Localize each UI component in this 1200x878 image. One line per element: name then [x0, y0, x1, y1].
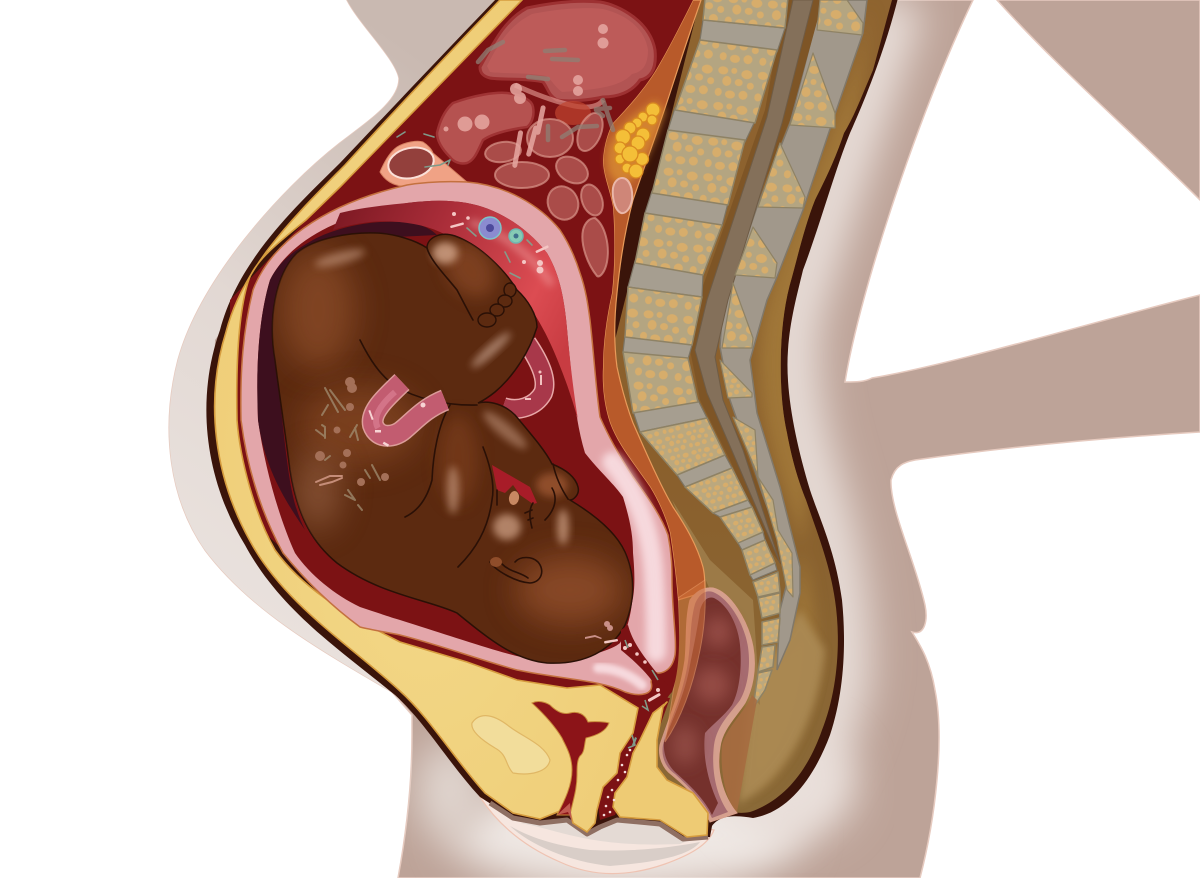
dark amniotic shadow	[257, 222, 437, 530]
abdominal organs	[380, 1, 665, 276]
placental highlight	[470, 222, 552, 285]
pelvic channel	[596, 695, 670, 820]
urethra gap	[557, 803, 572, 822]
rectum	[660, 588, 754, 822]
fetal flora	[315, 370, 613, 639]
nose	[508, 490, 520, 506]
spinous processes	[720, 0, 863, 597]
body outline	[206, 0, 898, 839]
ear lobe	[490, 557, 502, 567]
intervertebral discs	[623, 20, 785, 580]
orange membrane overlay	[665, 580, 705, 742]
red gap between hand and face	[492, 465, 537, 504]
spine	[623, 0, 867, 708]
colon	[437, 93, 533, 163]
back tissue	[600, 0, 892, 825]
stomach bulge	[555, 101, 591, 125]
liver	[480, 1, 655, 101]
vaginal flora specks	[603, 737, 637, 816]
cervical canal	[604, 625, 672, 748]
bladder and urethra	[532, 702, 609, 815]
pubic bone	[472, 716, 550, 774]
spinal cord	[695, 0, 813, 563]
organ flora capsules	[444, 24, 608, 168]
fetal body	[272, 233, 632, 663]
lower pelvic fat lobe	[613, 702, 708, 837]
cervix highlights	[612, 462, 656, 652]
perirectal tissue tint	[722, 695, 757, 812]
umbilical cord back loop	[503, 343, 545, 409]
fetal contour lines	[360, 248, 568, 583]
toes	[478, 283, 516, 327]
small bowel loop	[515, 85, 603, 107]
uterine cavity	[257, 201, 634, 660]
spinal cord channel	[690, 0, 823, 570]
abdominal wall fat and pubic region	[215, 0, 638, 832]
placental cells	[479, 217, 523, 243]
uterus	[241, 182, 675, 695]
peritoneal cavity	[230, 0, 693, 712]
placenta	[333, 201, 578, 420]
vertebral bodies	[623, 0, 788, 708]
spinal column grey tissue	[720, 0, 867, 670]
fetus	[272, 233, 632, 663]
abdominal wall orange layer	[603, 0, 705, 600]
intestine loops	[484, 109, 608, 276]
umbilical cord front loop	[373, 382, 445, 436]
fetal shading	[280, 233, 625, 625]
kidney glow and fat cluster	[607, 100, 665, 185]
ureter oval	[613, 178, 632, 213]
external genitalia	[480, 797, 714, 874]
uterine wall	[241, 182, 675, 695]
blood vessel cross-section	[380, 141, 467, 187]
